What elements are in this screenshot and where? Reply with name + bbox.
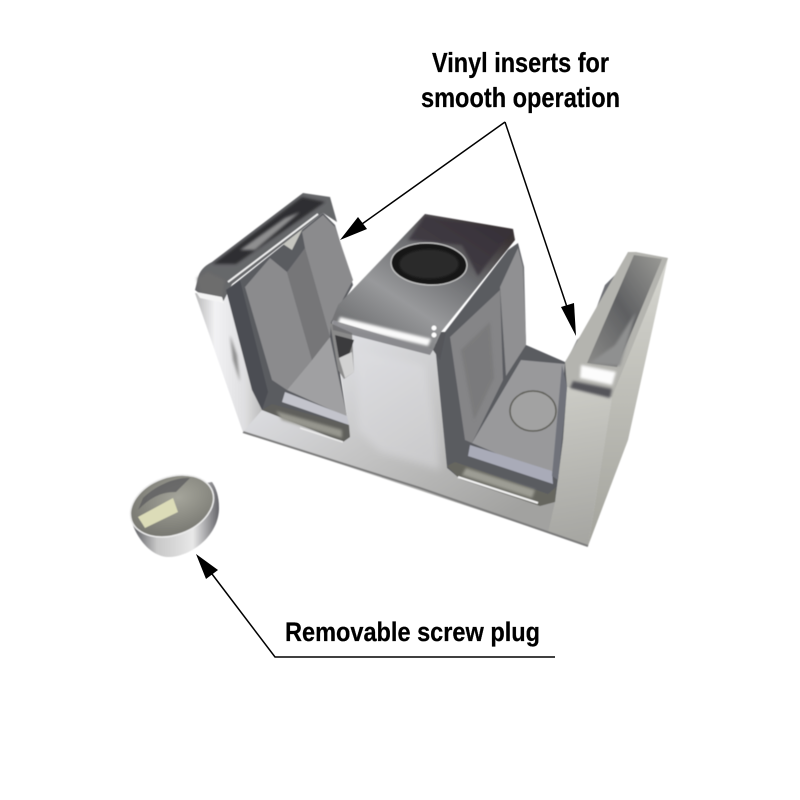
right plate: [565, 252, 668, 398]
label: removable screw plug: Removable screw plug: [285, 617, 540, 647]
centre block top: [332, 214, 515, 360]
icon: screw hole: [390, 241, 468, 287]
bracket product photo: [195, 193, 668, 546]
arrow: to left insert: [340, 122, 505, 240]
lower edge shadow: [243, 432, 588, 546]
right pillar front: [548, 387, 612, 546]
heading: vinyl inserts: Vinyl inserts for: [432, 47, 609, 78]
icon: screw plug: [122, 464, 222, 557]
left pillar face: [195, 293, 262, 432]
centre face highlight: [356, 350, 440, 470]
main front face: [195, 293, 612, 546]
heading: vinyl inserts: smooth operation: [421, 82, 620, 113]
right side face: [588, 258, 668, 546]
left slot interior: [227, 213, 354, 442]
arrow: to right insert: [505, 122, 576, 336]
left plate top rim: [195, 193, 337, 410]
right slot interior: [435, 243, 575, 506]
arrow: to screw plug with leader line: [196, 554, 555, 657]
heading: vinyl inserts: [421, 47, 620, 113]
